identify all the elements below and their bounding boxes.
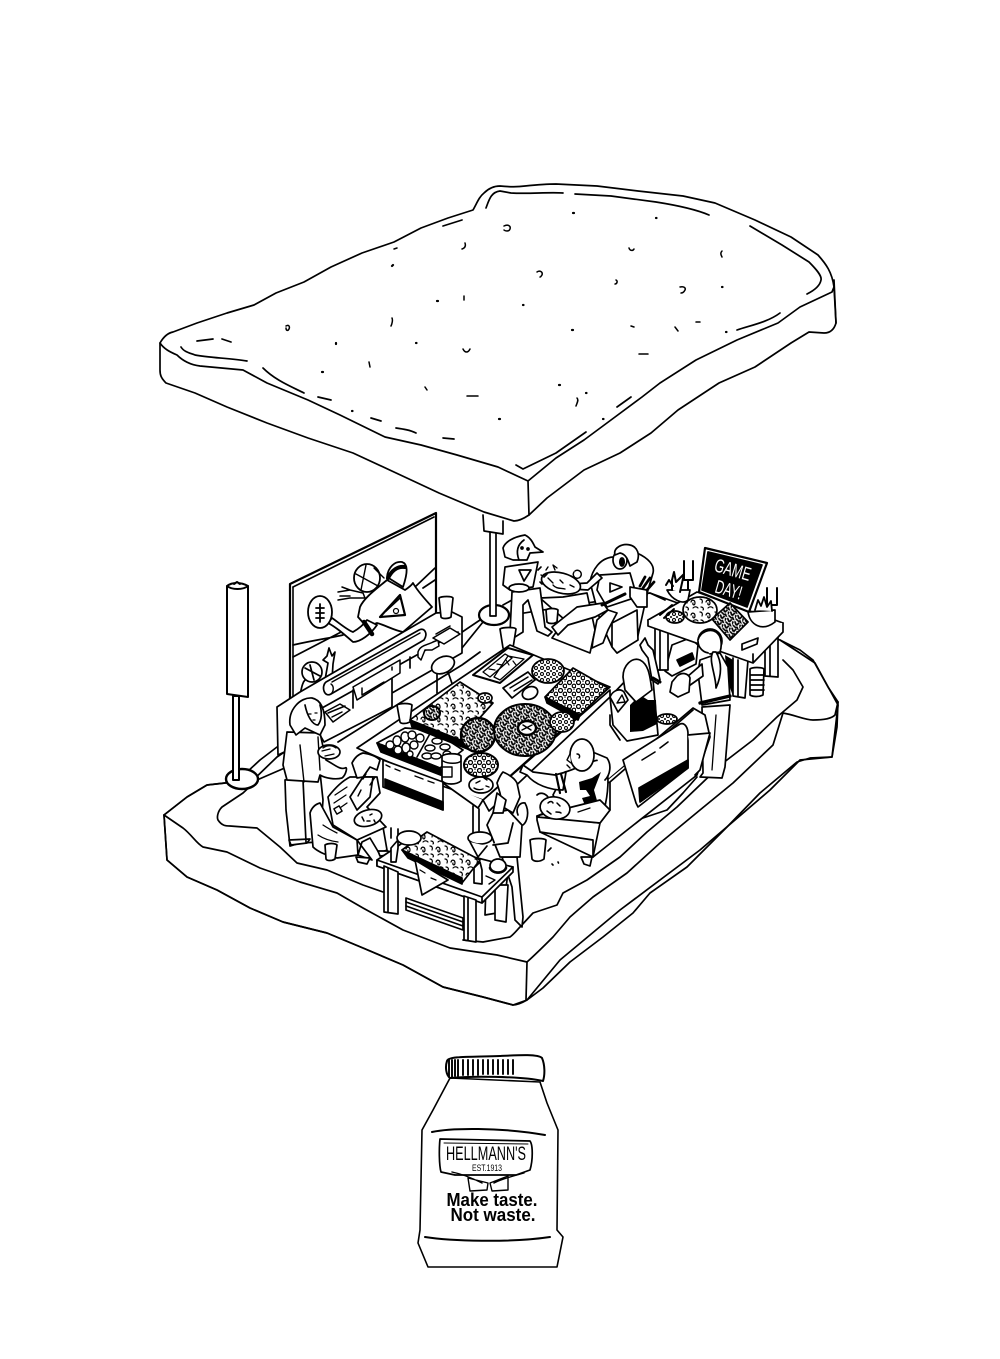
person on recliner	[539, 545, 654, 653]
console shelf objects	[325, 626, 460, 722]
tagline: Make taste.	[446, 1190, 538, 1210]
tagline	[446, 1190, 538, 1225]
right snack table	[648, 548, 783, 698]
seat cushion	[537, 800, 610, 823]
jar lid	[446, 1055, 544, 1081]
hanging cloth front	[383, 760, 443, 810]
jar on table	[442, 754, 461, 784]
floor edge in front of console	[338, 652, 480, 742]
man with raised arm	[610, 638, 677, 741]
label: HELLMANN'S	[446, 1144, 526, 1165]
small bowl	[464, 753, 498, 777]
blanket	[623, 724, 688, 807]
goal post right	[767, 588, 777, 612]
cup on floor by tray	[500, 628, 516, 650]
seated woman on pouf	[310, 753, 390, 864]
recliner person's body	[597, 573, 637, 607]
recliner chair	[590, 553, 653, 653]
sofa	[537, 708, 710, 866]
cup on floor by sofa	[530, 838, 558, 865]
man with number 3 jersey	[520, 739, 610, 823]
screen: football player	[308, 562, 432, 642]
speaker on a stand	[226, 582, 258, 789]
sofa arm cushion	[688, 733, 710, 775]
bottles	[391, 828, 398, 862]
bottom slice of bread with mayo	[164, 590, 838, 1005]
dip	[490, 859, 506, 873]
cup on console	[439, 596, 453, 618]
book stack	[406, 898, 463, 930]
ponytail woman standing	[670, 629, 730, 778]
bowl	[397, 831, 421, 845]
standing man with bowl	[468, 772, 528, 927]
table back leg	[495, 885, 508, 922]
TV console	[277, 596, 462, 755]
black shadow under right table	[725, 655, 733, 696]
small floor chair by right table	[665, 638, 698, 676]
cup on table	[397, 704, 412, 724]
small plate	[469, 777, 493, 793]
snack table food	[667, 590, 690, 602]
game day sign: GAME	[712, 556, 753, 586]
man's plate	[538, 795, 572, 821]
football snack	[520, 684, 540, 702]
game day sign: DAY!	[713, 577, 744, 605]
salad bowl	[461, 718, 495, 752]
television	[290, 513, 436, 702]
round side snack	[550, 712, 574, 732]
chip tray	[473, 648, 533, 683]
label	[439, 1139, 532, 1191]
popcorn tray	[402, 832, 480, 883]
main coffee table	[357, 645, 610, 833]
table legs	[384, 866, 398, 914]
goal post left	[684, 561, 693, 590]
bread specks	[286, 213, 726, 419]
label: EST.1913	[472, 1163, 502, 1173]
food on plate	[539, 568, 583, 598]
screen: referee	[300, 648, 335, 695]
small front table with popcorn	[377, 828, 513, 942]
mayonnaise jar	[418, 1055, 563, 1267]
pizza	[532, 659, 564, 683]
jar body	[418, 1078, 563, 1267]
meatball tray	[545, 668, 608, 715]
ribs tray	[503, 672, 535, 698]
tray of snacks	[377, 728, 463, 768]
standing girl near pole	[503, 535, 552, 637]
support pole right	[479, 515, 509, 625]
cup on floor by pouf	[325, 844, 337, 860]
soundbar	[324, 629, 426, 695]
trophy	[437, 672, 455, 698]
tabletop	[377, 840, 513, 903]
screen: field lines	[293, 568, 435, 657]
cup on chair	[546, 608, 558, 624]
game day sign	[699, 548, 767, 612]
crust highlight lines	[181, 191, 821, 469]
tagline: Not waste.	[450, 1205, 536, 1225]
stack of cups	[750, 668, 764, 696]
big round platter	[494, 704, 556, 756]
bread top edge	[164, 702, 838, 962]
large tray	[410, 682, 493, 740]
footrest	[540, 593, 595, 653]
bread side edge	[164, 640, 838, 1005]
standing woman left	[283, 698, 346, 846]
top slice of bread	[160, 184, 836, 521]
mayo edge	[217, 660, 803, 942]
